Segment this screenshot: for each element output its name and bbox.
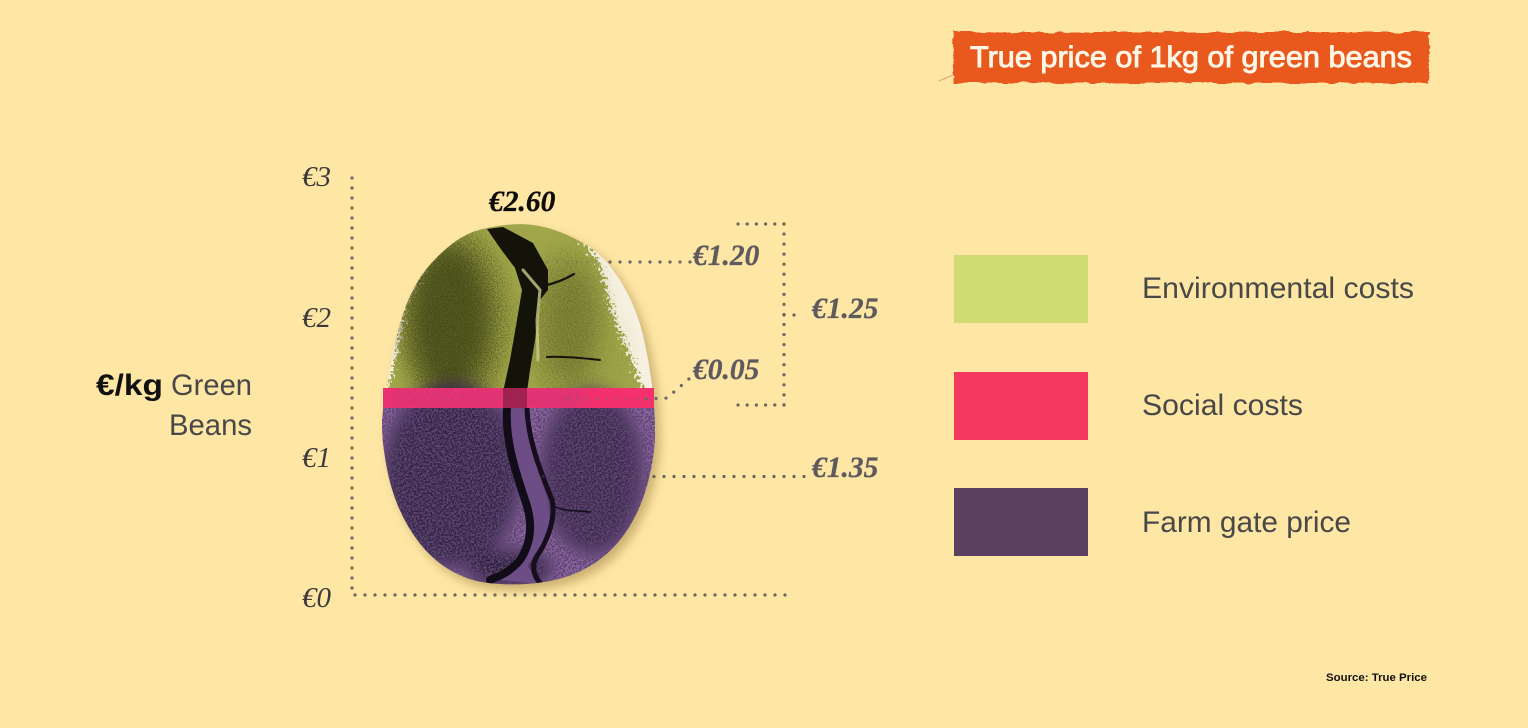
y-axis title: Beans bbox=[169, 409, 252, 442]
y-axis tick labels: €1 bbox=[302, 442, 331, 474]
environmental cost segment bbox=[383, 224, 644, 410]
label: environmental: Environmental costs bbox=[1142, 272, 1414, 305]
farm gate segment bbox=[370, 383, 670, 596]
label: farm gate: Farm gate price bbox=[1142, 506, 1351, 539]
value: 1.20: €1.20 bbox=[692, 240, 760, 272]
value: 1.35: €1.35 bbox=[811, 452, 878, 484]
swatch: farm gate bbox=[954, 488, 1088, 556]
axis dotted lines bbox=[352, 178, 786, 595]
source: Source: True Price bbox=[1326, 672, 1427, 684]
bracket bbox=[738, 224, 784, 406]
y-axis title bbox=[96, 369, 252, 442]
leader line: 0.05 bbox=[567, 378, 690, 399]
title banner bbox=[939, 32, 1429, 83]
y-axis tick labels: €2 bbox=[302, 302, 331, 334]
y-axis tick labels: €3 bbox=[302, 161, 331, 193]
bean shadow bbox=[387, 230, 660, 590]
leader line: 1.35 bbox=[523, 475, 805, 478]
value: 1.25: €1.25 bbox=[811, 293, 878, 325]
y-axis tick labels bbox=[302, 161, 332, 614]
bean segments bbox=[382, 224, 655, 584]
coffee bean stacked chart bbox=[370, 215, 670, 596]
crease bbox=[487, 227, 600, 585]
bracket leader bbox=[784, 313, 804, 317]
total label: €2.60 bbox=[488, 186, 556, 218]
swatch: environmental bbox=[954, 255, 1088, 323]
lower crease bbox=[500, 408, 549, 584]
title text: True price of 1kg of green beans bbox=[970, 41, 1412, 74]
y-axis tick labels: €0 bbox=[302, 582, 332, 614]
swatch: social bbox=[954, 372, 1088, 440]
value: 0.05: €0.05 bbox=[692, 354, 759, 386]
y-axis title: Green bbox=[171, 369, 252, 402]
y-axis title: €/kg bbox=[96, 369, 163, 402]
label: social: Social costs bbox=[1142, 389, 1303, 422]
leader line: 1.20 bbox=[547, 260, 691, 264]
legend bbox=[954, 255, 1414, 556]
social cost band bbox=[383, 388, 654, 408]
